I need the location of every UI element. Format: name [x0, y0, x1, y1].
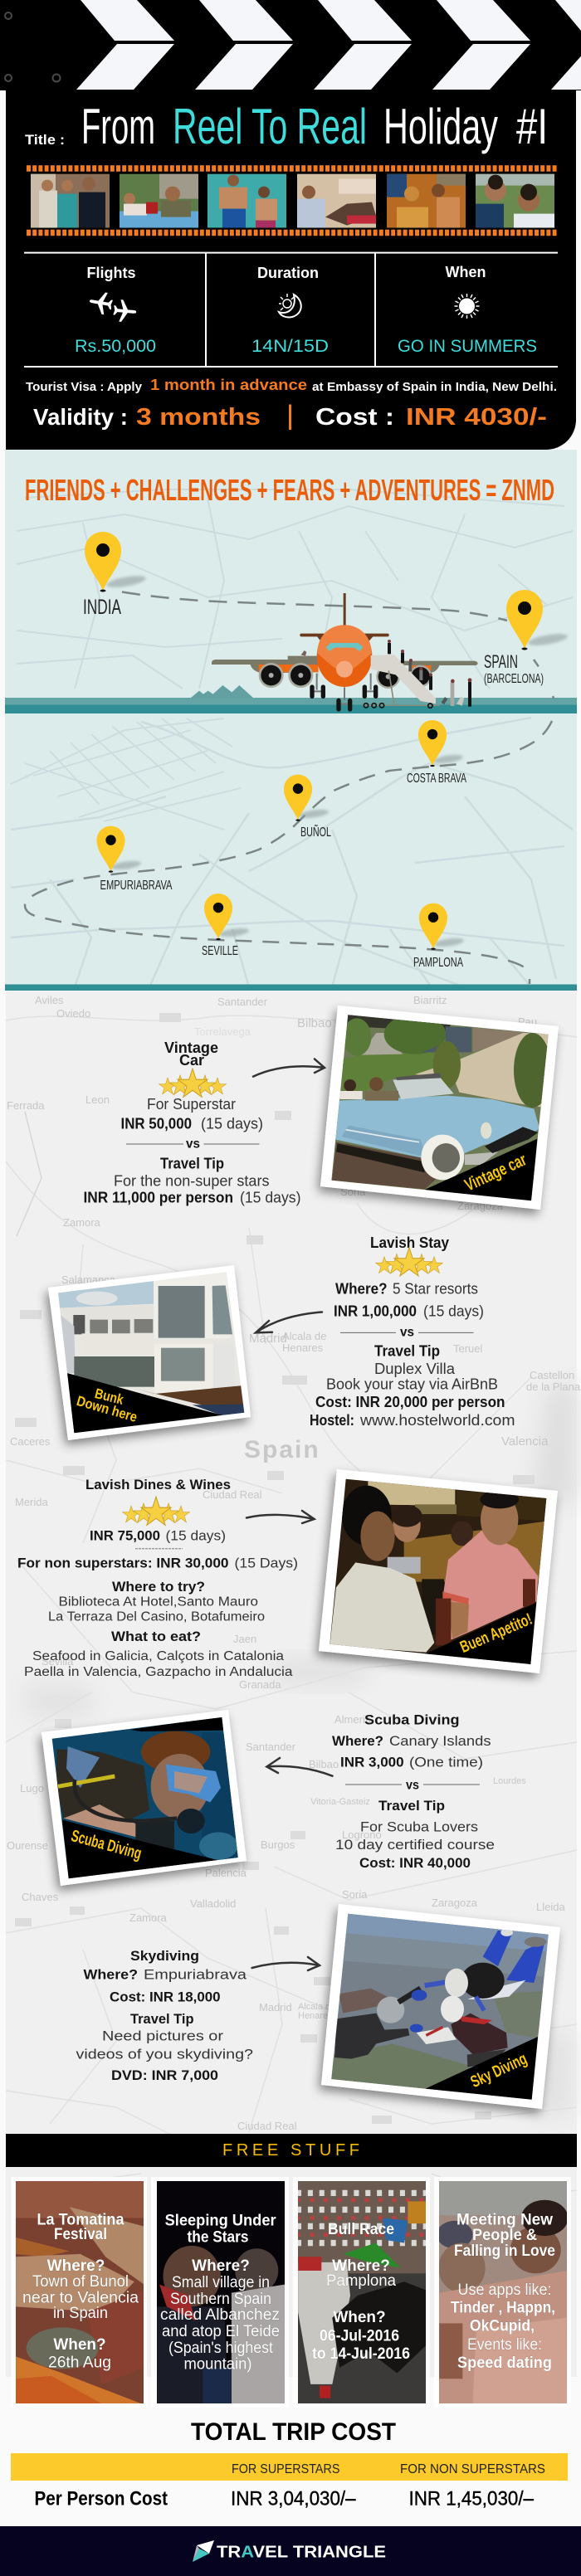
card: Meeting New People: Tinder , Happn,	[451, 2300, 555, 2317]
photo: villa	[48, 1265, 251, 1440]
title: From	[81, 99, 155, 154]
map place names: Leon	[85, 1093, 110, 1106]
text: lavish stay details: Hostel:	[310, 1412, 354, 1429]
photo: restaurant: Buen Apetito!	[457, 1610, 535, 1657]
text: lavish stay details: Travel Tip	[374, 1342, 440, 1359]
airplane with boarding passengers	[191, 593, 478, 712]
when cell: When	[445, 264, 486, 280]
photo: scuba diver	[42, 1710, 247, 1886]
text: skydiving details	[76, 1948, 253, 2083]
text: scuba details: For Scuba Lovers	[360, 1819, 478, 1835]
pin: Spain (Barcelona): SPAIN	[484, 651, 518, 672]
photo: villa: Down here	[75, 1393, 139, 1425]
cost table header: FOR NON SUPERSTARS	[400, 2462, 545, 2476]
pin: Seville: SEVILLE	[202, 944, 238, 958]
map place names: de la Plana	[526, 1381, 581, 1393]
card: Meeting New People: Meeting New	[456, 2212, 553, 2229]
card: La Tomatina: Where?	[47, 2257, 105, 2275]
visa note: at Embassy of Spain in India, New Delhi.	[312, 381, 557, 394]
cost table header	[11, 2453, 568, 2481]
card: La Tomatina: near to Valencia	[22, 2290, 139, 2306]
map place names: Madrid	[259, 2001, 292, 2014]
photo: vintage car: Vintage car	[462, 1150, 530, 1195]
pin: India: INDIA	[83, 596, 121, 619]
duration cell: 14N/15D	[251, 337, 329, 356]
map place names: Pau	[518, 1015, 537, 1028]
card: La Tomatina	[11, 2177, 147, 2408]
card: La Tomatina: Festival	[54, 2226, 107, 2243]
text: scuba details: Scuba Diving	[364, 1712, 460, 1727]
pin: India	[83, 532, 147, 619]
map place names: Salamanca	[61, 1273, 116, 1286]
pin: Empuriabrava: EMPURIABRAVA	[100, 879, 173, 893]
photo: villa: Bunk	[93, 1385, 125, 1408]
panel: clapperboard header	[0, 0, 581, 450]
card: Sleeping Under the Stars: called Albanchez	[160, 2306, 280, 2324]
map place names: Henares	[298, 2011, 333, 2021]
text: vintage car details: (15 days)	[201, 1116, 263, 1132]
dashed flight path: India to Spain	[122, 592, 554, 699]
photo: skydivers: Sky Diving	[468, 2050, 530, 2091]
map place names: Ciudad Real	[203, 1488, 262, 1501]
text: vintage car details: For Superstar	[147, 1096, 236, 1113]
text: vintage car details: INR 50,000	[121, 1116, 192, 1132]
card: Sleeping Under the Stars: the Stars	[188, 2228, 249, 2247]
text: scuba details: INR 3,000	[340, 1754, 404, 1770]
map bottom band	[5, 984, 577, 991]
text: dining details: What to eat?	[111, 1629, 201, 1644]
validity and cost: Cost :	[315, 404, 394, 431]
text: lavish stay details: www.hostelworld.com	[359, 1412, 515, 1429]
map place names: Castellon	[530, 1369, 574, 1381]
validity and cost: Validity :	[33, 404, 128, 430]
card: Meeting New People	[434, 2177, 571, 2408]
validity and cost: 3 months	[136, 404, 261, 431]
film strip with movie stills	[27, 168, 558, 232]
map place names: Valladolid	[190, 1897, 236, 1910]
text: dining details: INR 75,000	[90, 1528, 160, 1543]
title: Title :	[25, 132, 65, 148]
card: La Tomatina: 26th Aug	[48, 2354, 111, 2372]
card: Meeting New People: Events like:	[467, 2336, 542, 2354]
arrow to dining photo	[247, 1511, 315, 1523]
text: lavish stay details: Lavish Stay	[370, 1234, 449, 1251]
mountains	[191, 685, 253, 698]
pin: Bunol	[284, 775, 331, 840]
flights cell	[75, 265, 156, 356]
title: Reel To Real	[173, 99, 367, 154]
duration cell	[251, 265, 329, 356]
text: scuba details: Canary Islands	[389, 1733, 491, 1749]
map place names: Alcala de	[282, 1330, 326, 1342]
clapper hinge holes	[5, 12, 60, 81]
map place names	[7, 994, 581, 2132]
map place names: Santander	[246, 1741, 296, 1753]
validity and cost	[33, 404, 547, 431]
text: dining details: Biblioteca At Hotel,Santo Mauro	[58, 1595, 258, 1609]
card: Bull Race: 06-Jul-2016	[320, 2327, 399, 2345]
trip facts table	[24, 253, 558, 367]
card: La Tomatina: La Tomatina	[37, 2212, 124, 2229]
card: Sleeping Under the Stars: mountain)	[184, 2356, 252, 2373]
text: skydiving details: videos of you skydiving?	[76, 2046, 253, 2062]
map place names: Valencia	[501, 1434, 549, 1449]
map place names: Biarritz	[413, 994, 447, 1006]
pin: Pamplona: PAMPLONA	[413, 956, 463, 970]
map place names: Merida	[15, 1496, 49, 1508]
map place names: Lleida	[536, 1901, 565, 1913]
map place names: Burgos	[261, 1838, 295, 1851]
highway markers	[15, 1013, 535, 2124]
ground band	[5, 698, 577, 713]
photo: restaurant	[319, 1469, 558, 1673]
text: scuba details: Cost: INR 40,000	[359, 1855, 471, 1871]
text: dining details: Lavish Dines & Wines	[85, 1477, 231, 1493]
text: skydiving details: Cost: INR 18,000	[110, 1989, 221, 2005]
arrow to vintage car photo	[253, 1059, 325, 1077]
map place names: Madrid	[249, 1332, 287, 1346]
text: vintage car details: Vintage	[164, 1040, 218, 1056]
text: vintage car details	[83, 1040, 300, 1206]
logo wordmark: TRAVEL TRIANGLE	[217, 2543, 386, 2561]
text: skydiving details: DVD: INR 7,000	[111, 2067, 218, 2083]
heading: total trip cost: TOTAL TRIP COST	[191, 2418, 396, 2446]
clapper chevron stripes	[76, 0, 581, 90]
map place names: Torrelavega	[194, 1025, 251, 1038]
text: dining details: Where to try?	[112, 1579, 205, 1595]
dashed route through Spain	[25, 721, 552, 984]
card: La Tomatina: Town of Bunol	[32, 2273, 129, 2291]
cost table row: Per Person Cost	[35, 2487, 168, 2510]
map place names: Chaves	[22, 1891, 59, 1903]
map place names: Soria	[342, 1888, 368, 1901]
map roads	[6, 1014, 577, 2199]
text: scuba details: (One time)	[409, 1754, 483, 1770]
text: lavish stay details: Cost: INR 20,000 per person	[315, 1394, 505, 1410]
map place names: Lugo	[20, 1782, 44, 1794]
map place names: Henares	[282, 1342, 324, 1354]
cost table row	[35, 2487, 535, 2510]
panel: route map	[5, 450, 577, 991]
map place names: Palencia	[205, 1867, 247, 1879]
card: Meeting New People: Speed dating	[457, 2354, 552, 2372]
text: dining details: For non superstars: INR 30,000	[17, 1556, 229, 1571]
card: Sleeping Under the Stars: Where?	[192, 2257, 250, 2275]
text: scuba details: Where?	[332, 1733, 383, 1749]
map place names: Ferrada	[7, 1099, 45, 1112]
text: skydiving details: Skydiving	[130, 1948, 199, 1964]
text: dining details: (15 days)	[166, 1528, 226, 1543]
text: skydiving details: Where?	[83, 1967, 138, 1983]
card: Sleeping Under the Stars	[151, 2177, 289, 2408]
card: Bull Race: When?	[333, 2309, 386, 2326]
pin: Costa Brava: COSTA BRAVA	[407, 772, 466, 786]
photo: skydivers	[321, 1904, 560, 2109]
map place names: Zaragoza	[457, 1200, 504, 1212]
map place names: Jaen	[233, 1633, 256, 1645]
text: skydiving details: Travel Tip	[130, 2011, 194, 2027]
panel: Spain grey map background	[6, 991, 581, 2377]
cost table row: INR 1,45,030/–	[408, 2487, 535, 2510]
card: Sleeping Under the Stars: Small village in	[172, 2274, 270, 2291]
section: vintage car	[83, 1006, 559, 1210]
text: dining details: Seafood in Galicia, Calçots in Catalonia	[32, 1649, 284, 1663]
pin: Spain (Barcelona)	[484, 590, 569, 686]
map place names: Zamora	[129, 1911, 168, 1924]
section: lavish dines and wines	[17, 1469, 558, 1679]
heading: free stuff: FREE STUFF	[222, 2141, 359, 2160]
map place names: Spain	[244, 1436, 320, 1463]
visa note	[26, 376, 557, 394]
arrow to skydiving photo	[252, 1957, 320, 1970]
text: scuba details	[332, 1712, 495, 1871]
map place names: Sevilla	[42, 1655, 74, 1668]
text: vintage car details: For the non-super stars	[114, 1173, 269, 1190]
text: scuba details: vs	[406, 1779, 419, 1792]
map place names: Lourdes	[493, 1776, 526, 1786]
pin: Empuriabrava	[96, 826, 173, 893]
bird	[301, 650, 306, 656]
map place names: Almeria	[334, 1713, 372, 1726]
text: lavish stay details	[310, 1234, 515, 1429]
section: skydiving	[76, 1904, 560, 2109]
logo mark	[193, 2540, 214, 2562]
card: Bull Race: Where?	[332, 2257, 390, 2275]
icon: sun	[455, 294, 480, 319]
card: Sleeping Under the Stars: Southern Spain	[170, 2291, 271, 2308]
title: Holiday	[383, 99, 498, 154]
cost table header: FOR SUPERSTARS	[232, 2462, 339, 2476]
text: lavish stay details: INR 1,00,000	[334, 1303, 417, 1319]
text: lavish stay details: vs	[400, 1326, 414, 1340]
card: Bull Race	[293, 2177, 430, 2408]
map place names: Caceres	[10, 1435, 51, 1448]
section: scuba diving	[42, 1710, 495, 1886]
when cell: GO IN SUMMERS	[398, 337, 537, 356]
visa note: Tourist Visa : Apply	[26, 381, 142, 394]
map place names: Teruel	[453, 1342, 483, 1355]
card: Bull Race: Bull Race	[328, 2221, 394, 2238]
map street lines	[11, 489, 573, 987]
map place names: Oviedo	[56, 1007, 90, 1020]
pin: Spain (Barcelona): (BARCELONA)	[484, 672, 544, 686]
text: vintage car details: (15 days)	[240, 1190, 300, 1206]
flights cell: Rs.50,000	[75, 337, 156, 356]
text: lavish stay details: Where?	[335, 1281, 387, 1298]
text: dining details: (15 Days)	[234, 1556, 298, 1571]
card: Meeting New People: Use apps like:	[458, 2281, 551, 2299]
text: vintage car details: Travel Tip	[160, 1156, 224, 1172]
text: dining details	[17, 1477, 298, 1679]
text: dining details: Paella in Valencia, Gazpacho in Andalucia	[24, 1665, 293, 1679]
card: Sleeping Under the Stars: and atop El Teide	[162, 2323, 280, 2340]
map place names: Ciudad Real	[237, 2120, 297, 2132]
map place names: Zaragoza	[432, 1897, 478, 1909]
card: Meeting New People: OkCupid,	[470, 2318, 535, 2335]
arrow to stay photo	[256, 1312, 322, 1332]
map place names: Zamora	[63, 1216, 101, 1229]
card: La Tomatina: When?	[53, 2336, 106, 2354]
text: skydiving details: Empuriabrava	[144, 1967, 247, 1983]
passengers	[388, 640, 471, 707]
text: scuba details: 10 day certified course	[335, 1837, 495, 1853]
card: La Tomatina: in Spain	[53, 2305, 108, 2322]
text: vintage car details: Car	[179, 1052, 204, 1069]
icon: two planes	[88, 290, 137, 323]
text: lavish stay details: (15 days)	[423, 1303, 484, 1319]
section: lavish stay	[48, 1234, 515, 1440]
map place names: Soria	[340, 1186, 366, 1198]
card: Bull Race: Pamplona	[326, 2272, 396, 2290]
arrow to scuba photo	[266, 1758, 332, 1776]
map place names: Aviles	[35, 994, 64, 1006]
icon: sun and moon	[279, 294, 301, 318]
card: Sleeping Under the Stars: (Spain's highest	[168, 2340, 274, 2357]
pin: Bunol: BUÑOL	[300, 823, 331, 840]
text: vintage car details: vs	[186, 1137, 200, 1152]
text: dining details: La Terraza Del Casino, Botafumeiro	[48, 1609, 265, 1624]
map place names: Ourense	[7, 1839, 48, 1852]
map place names: Vitoria-Gasteiz	[310, 1797, 370, 1807]
text: lavish stay details: Duplex Villa	[374, 1361, 456, 1377]
map place names: Bilbao	[309, 1758, 339, 1770]
card: Bull Race: to 14-Jul-2016	[312, 2345, 410, 2363]
pin: Seville	[202, 894, 249, 958]
text: scuba details: Travel Tip	[378, 1798, 445, 1814]
cost table row: INR 3,04,030/–	[231, 2487, 356, 2510]
map place names: Granada	[239, 1678, 281, 1691]
map place names: Logrono	[342, 1829, 382, 1841]
map place names: Alcala de	[298, 2002, 335, 2012]
validity and cost: INR 4030/-	[406, 404, 547, 431]
when cell	[398, 264, 537, 356]
card: Meeting New People: People &	[472, 2227, 537, 2244]
card: Sleeping Under the Stars: Sleeping Under	[165, 2213, 276, 2230]
title: #I	[516, 99, 548, 154]
photo: vintage car	[320, 1006, 559, 1210]
flights cell: Flights	[86, 265, 136, 281]
pin: Costa Brava	[407, 720, 466, 786]
text: lavish stay details: 5 Star resorts	[393, 1281, 478, 1298]
text: vintage car details: INR 11,000 per person	[83, 1190, 233, 1206]
pin: Pamplona	[413, 903, 464, 970]
photo: scuba diver: Scuba Diving	[69, 1827, 144, 1863]
visa note: 1 month in advance	[150, 376, 307, 393]
panel: total trip cost	[11, 2418, 568, 2510]
panel: free stuff	[6, 2134, 577, 2408]
text: lavish stay details: Book your stay via AirBnB	[326, 1376, 498, 1393]
text: skydiving details: Need pictures or	[102, 2028, 223, 2044]
title	[25, 99, 548, 154]
card: Meeting New People: Falling in Love	[454, 2242, 555, 2260]
map place names: Santander	[217, 996, 268, 1008]
map place names: Bilbao	[297, 1016, 332, 1030]
duration cell: Duration	[257, 265, 319, 281]
footer: Travel Triangle logo	[0, 2526, 581, 2576]
